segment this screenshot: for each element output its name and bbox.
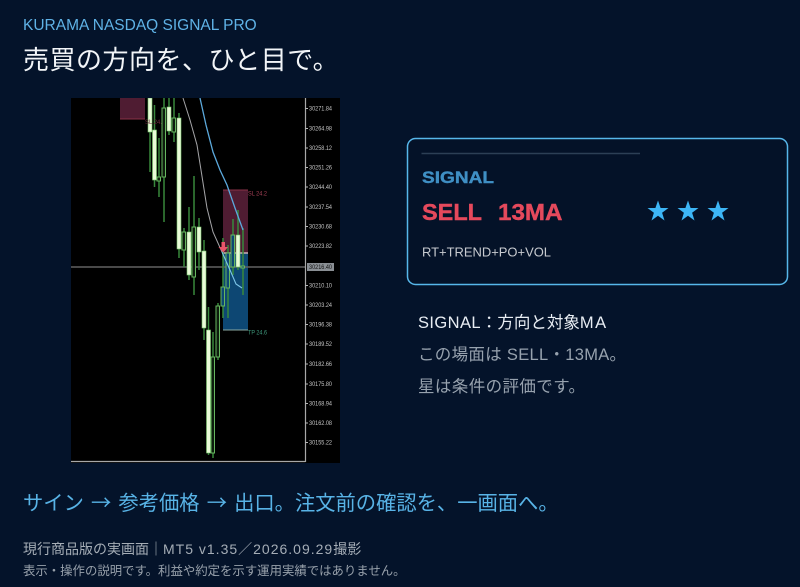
candle wicks bbox=[150, 98, 243, 458]
card value: SELL 13MA: SELL bbox=[422, 199, 482, 225]
SL and TP labels bbox=[145, 119, 267, 336]
price axis: 30203.24 bbox=[309, 303, 333, 309]
price axis: 30196.38 bbox=[309, 322, 333, 328]
footnote: capture info: 現行商品版の実画面｜MT5 v1.35／2026.09.29撮影 bbox=[23, 541, 361, 557]
price axis: 30271.84 bbox=[309, 106, 333, 112]
card value: SELL 13MA bbox=[422, 199, 562, 225]
candle bodies filled bbox=[148, 98, 240, 453]
price axis: 30223.82 bbox=[309, 244, 333, 250]
price axis: 30182.66 bbox=[309, 362, 333, 368]
price axis: 30168.94 bbox=[309, 402, 333, 408]
price axis: 30230.68 bbox=[309, 224, 333, 230]
SL and TP labels: SL 24. bbox=[145, 119, 162, 126]
price axis: 30155.22 bbox=[309, 440, 333, 446]
card value: SELL 13MA: 13MA bbox=[498, 199, 562, 225]
price axis: 30175.80 bbox=[309, 382, 333, 388]
price axis: 30216.40 bbox=[309, 265, 333, 271]
moving average: cyan lower bbox=[222, 252, 242, 288]
explanation line 2: この場面は SELL・13MA。 bbox=[418, 346, 626, 364]
tagline: サイン → 参考価格 → 出口。注文前の確認を、一画面へ。 bbox=[23, 486, 559, 516]
card label: SIGNAL: SIGNAL bbox=[422, 168, 494, 187]
chart background bbox=[71, 98, 340, 463]
price axis: 30189.52 bbox=[309, 342, 333, 348]
price axis: 30251.26 bbox=[309, 166, 333, 172]
explanation text bbox=[418, 314, 626, 396]
title: 売買の方向を、ひと目で。 bbox=[23, 45, 339, 75]
price axis: 30264.98 bbox=[309, 126, 333, 132]
price axis: 30162.08 bbox=[309, 421, 333, 427]
card conditions: RT+TREND+PO+VOL bbox=[422, 244, 551, 260]
price axis: 30237.54 bbox=[309, 205, 333, 211]
price axis: 30210.10 bbox=[309, 284, 333, 290]
sell arrow bbox=[218, 242, 228, 252]
SL and TP labels: TP 24.6 bbox=[248, 330, 267, 336]
SL and TP labels: SL 24.2 bbox=[248, 190, 267, 198]
explanation line 1: SIGNAL：方向と対象MA bbox=[418, 314, 608, 332]
price axis: 30244.40 bbox=[309, 185, 333, 191]
price axis: 30258.12 bbox=[309, 146, 333, 152]
SL and TP zones bbox=[120, 98, 248, 330]
price line bbox=[71, 266, 305, 268]
explanation line 3: 星は条件の評価です。 bbox=[418, 378, 585, 396]
candle bodies hollow bbox=[157, 108, 244, 453]
footnote: disclaimer: 表示・操作の説明です。利益や約定を示す運用実績ではありません。 bbox=[23, 564, 406, 578]
moving average: blue bbox=[200, 98, 243, 230]
price axis bbox=[71, 98, 334, 462]
eyebrow: product name: KURAMA NASDAQ SIGNAL PRO bbox=[23, 17, 257, 34]
rating stars bbox=[648, 200, 728, 220]
moving average: gray bbox=[183, 98, 222, 252]
